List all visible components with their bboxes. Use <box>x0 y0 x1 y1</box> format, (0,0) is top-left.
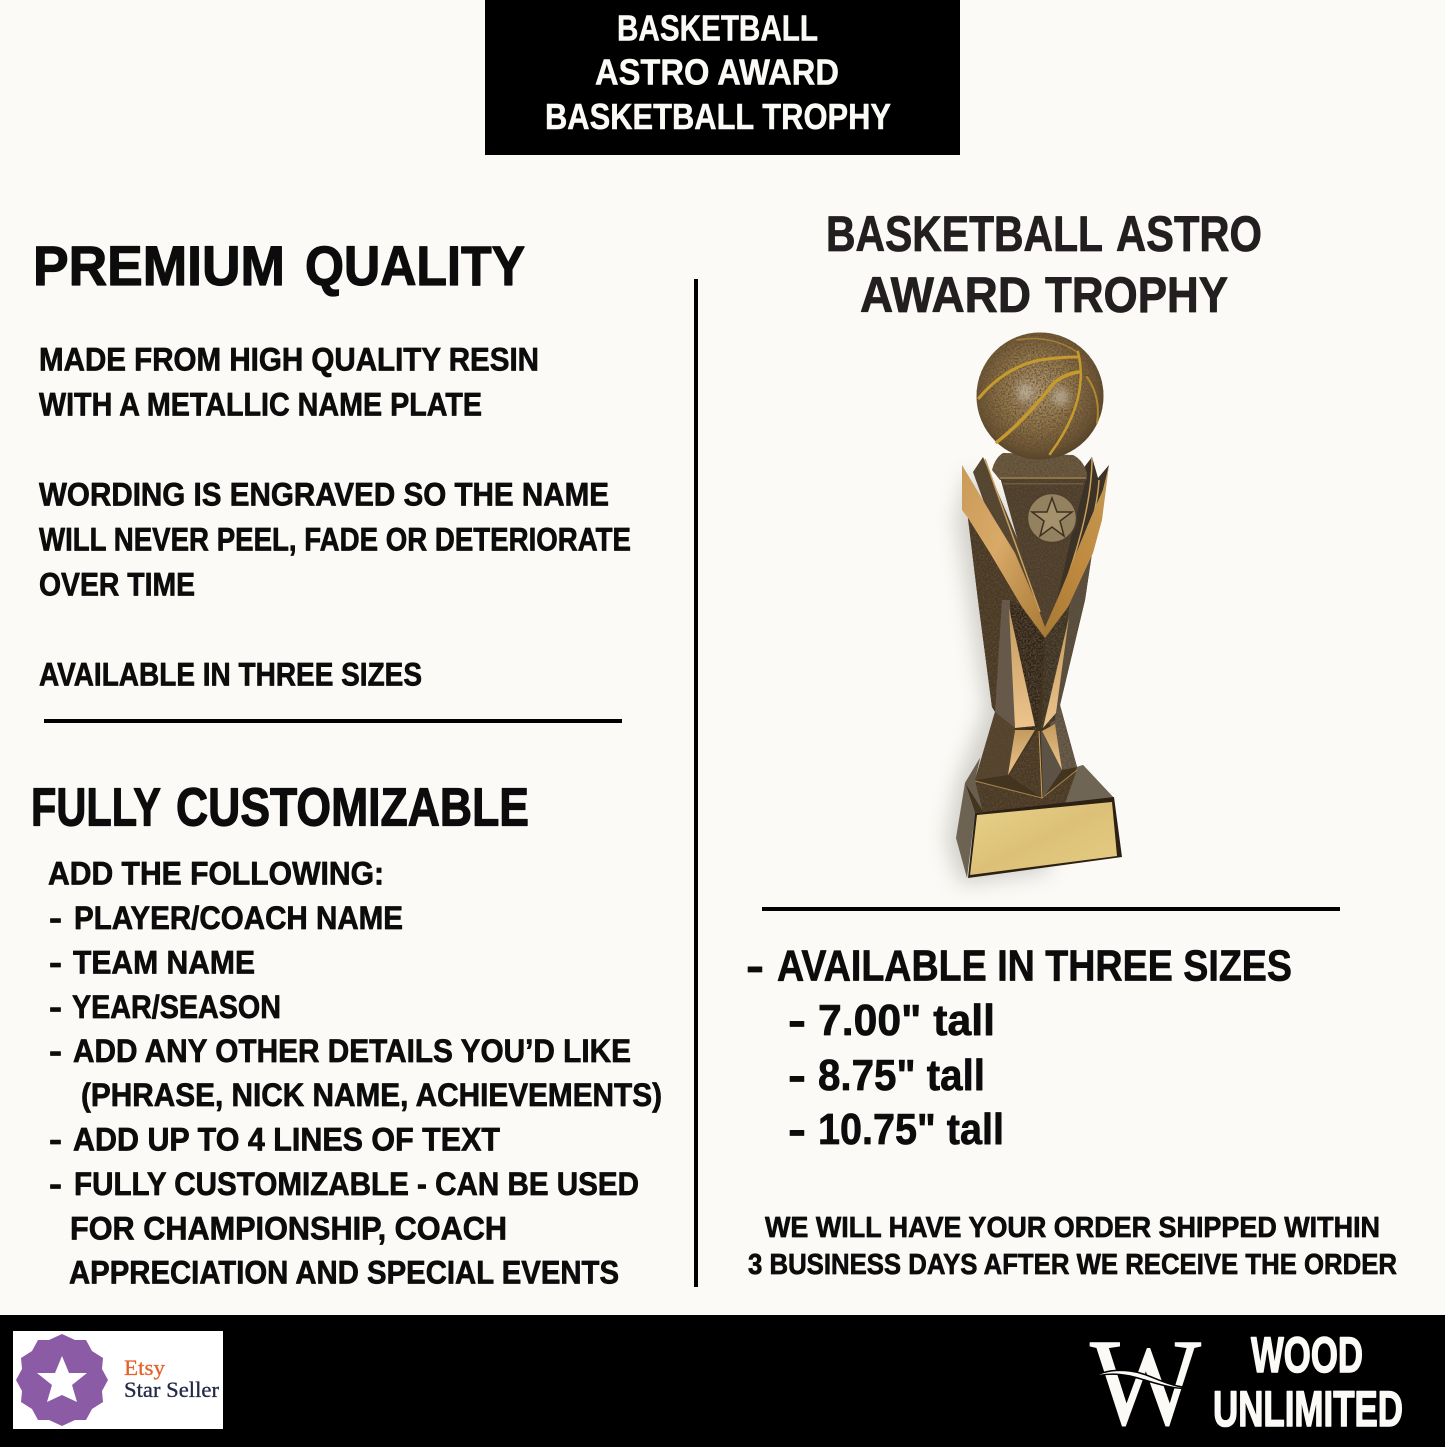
text block: customization list: - <box>49 1166 62 1202</box>
text block: available sizes <box>746 942 1292 1154</box>
right fins <box>1045 457 1109 625</box>
text block: customization list: TEAM NAME <box>73 944 255 980</box>
heading: premium quality <box>33 234 525 297</box>
header banner: BASKETBALL <box>617 8 818 48</box>
basketball <box>976 332 1104 460</box>
text block: customization list: - <box>49 1033 62 1069</box>
text block: available sizes: 8.75" tall <box>818 1051 985 1100</box>
wordmark: WOOD <box>1251 1327 1363 1383</box>
lower gold blades <box>1008 608 1069 775</box>
icon: purple star rosette <box>16 1334 108 1426</box>
trophy silhouette <box>965 518 1114 813</box>
heading: product title <box>826 206 1262 323</box>
text block: customization list: (PHRASE, NICK NAME, ACHIEVEMENTS) <box>81 1077 662 1113</box>
header banner: BASKETBALL TROPHY <box>545 96 891 137</box>
text block: customization list: YEAR/SEASON <box>72 989 281 1025</box>
text block: customization list <box>48 856 662 1290</box>
left fin <box>973 457 1040 612</box>
text block: customization list: ADD UP TO 4 LINES OF TEXT <box>73 1122 500 1158</box>
text block: customization list: - <box>49 900 62 936</box>
text block: customization list: FOR CHAMPIONSHIP, COACH <box>70 1210 507 1246</box>
wood unlimited logo <box>1090 1314 1403 1447</box>
text block: available sizes: - <box>788 1051 806 1100</box>
heading: premium quality: PREMIUM <box>33 234 285 297</box>
text block: available sizes: AVAILABLE IN THREE SIZES <box>777 942 1292 990</box>
panel: fully customizable <box>31 778 662 1290</box>
heading: product title: ASTRO <box>1116 206 1262 262</box>
text block: quality details: WORDING IS ENGRAVED SO THE NAME <box>39 476 609 512</box>
text block: customization list: - <box>49 944 62 980</box>
base block <box>956 758 1122 878</box>
text block: quality details: OVER TIME <box>39 566 195 602</box>
heading: fully customizable <box>31 778 529 838</box>
star seller label: Star Seller <box>124 1377 220 1402</box>
gold v band <box>962 465 1109 638</box>
star medallion <box>1028 494 1076 542</box>
trophy illustration <box>946 332 1122 884</box>
etsy star seller badge <box>13 1331 223 1429</box>
heading: product title: TROPHY <box>1045 267 1228 323</box>
heading: fully customizable: FULLY <box>31 778 161 838</box>
text block: quality details: MADE FROM HIGH QUALITY RESIN <box>39 342 539 378</box>
text block: quality details <box>39 342 631 692</box>
text block: quality details: WITH A METALLIC NAME PLATE <box>39 386 482 422</box>
gold edge lines <box>985 458 1099 618</box>
text block: quality details: WILL NEVER PEEL, FADE OR DETERIORATE <box>39 522 631 558</box>
etsy label: Etsy <box>124 1355 165 1380</box>
central cup <box>1000 477 1087 627</box>
footer bar <box>0 1314 1445 1447</box>
text block: shipping note: WE WILL HAVE YOUR ORDER SHIPPED WITHIN <box>765 1212 1380 1244</box>
text block: available sizes: 7.00" tall <box>818 996 995 1045</box>
text block: customization list: PLAYER/COACH NAME <box>74 900 403 936</box>
heading: premium quality: QUALITY <box>305 234 525 297</box>
text block: customization list: APPRECIATION AND SPECIAL EVENTS <box>69 1254 619 1290</box>
column body facets <box>968 518 1092 730</box>
text block: customization list: - <box>49 989 62 1025</box>
panel: premium quality <box>33 234 631 692</box>
text block: customization list: ADD ANY OTHER DETAILS YOU’D LIKE <box>73 1033 631 1069</box>
heading: product title: AWARD <box>860 267 1031 323</box>
header banner <box>485 0 960 155</box>
text block: customization list: - <box>49 1122 62 1158</box>
heading: fully customizable: CUSTOMIZABLE <box>176 778 529 838</box>
heading: product title: BASKETBALL <box>826 206 1103 262</box>
text block: customization list: FULLY CUSTOMIZABLE - CAN BE USED <box>74 1166 639 1202</box>
header banner: ASTRO AWARD <box>595 52 839 92</box>
column neck facets <box>975 705 1077 798</box>
text block: available sizes: - <box>788 1105 806 1154</box>
collar <box>992 453 1087 480</box>
text block: available sizes: - <box>746 942 764 990</box>
text block: customization list: ADD THE FOLLOWING: <box>48 856 384 892</box>
text block: shipping note <box>748 1212 1397 1281</box>
text block: available sizes: - <box>788 996 806 1045</box>
text block: quality details: AVAILABLE IN THREE SIZES <box>39 656 422 692</box>
text block: available sizes: 10.75" tall <box>818 1105 1004 1154</box>
icon: w monogram: W <box>1090 1314 1201 1447</box>
trophy shadow <box>946 470 1050 884</box>
